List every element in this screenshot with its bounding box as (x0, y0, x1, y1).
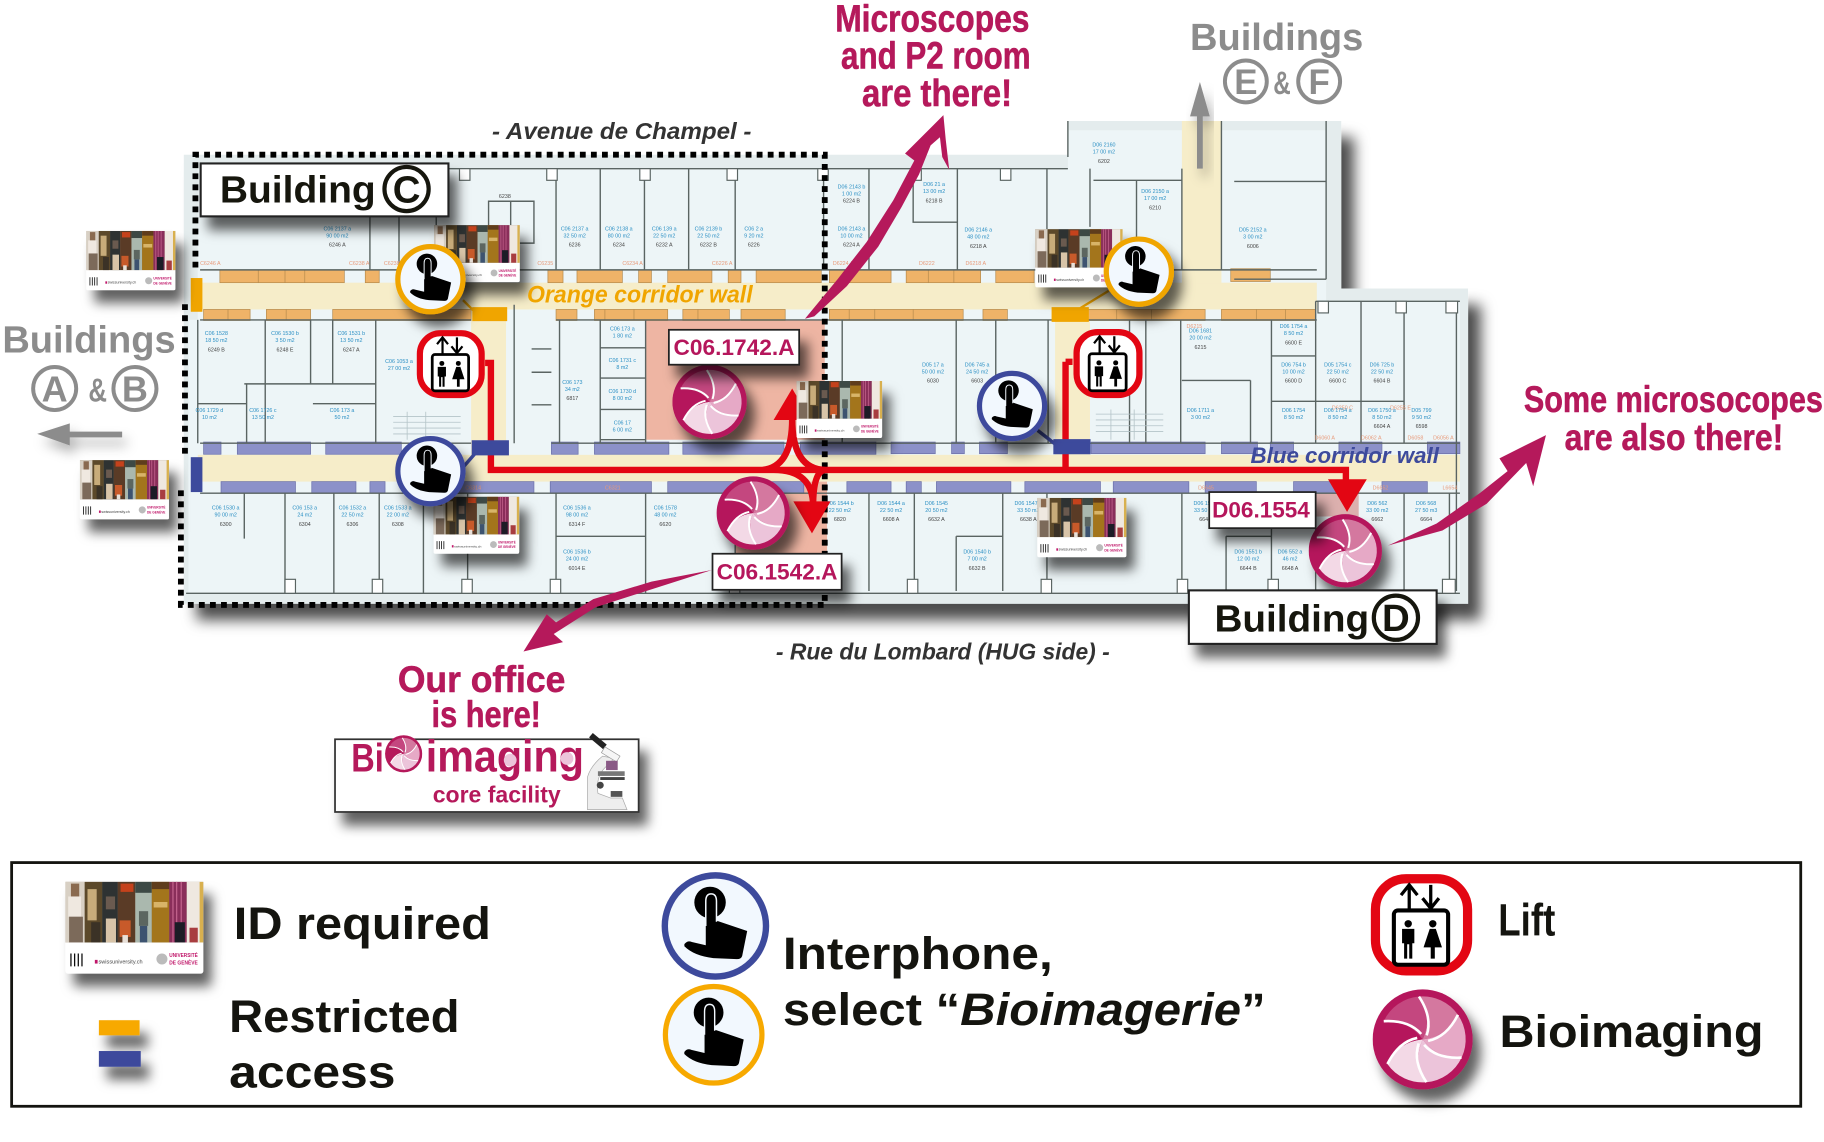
direction: Buildings E and F: & (1273, 65, 1291, 101)
floor plan (184, 121, 1468, 604)
room labels: C06 2138 a (605, 226, 633, 232)
legend: lift icon (1375, 879, 1468, 971)
room labels: C06 173 a (610, 326, 635, 332)
room labels: 6632 B (969, 566, 986, 572)
ID card: entrance left upper (86, 231, 175, 290)
room labels: 8 50 m2 (1372, 415, 1392, 421)
room labels: 48 00 m2 (654, 512, 677, 518)
room labels: 6608 A (883, 517, 900, 523)
door codes: C6314 (465, 486, 481, 492)
room labels: D05 2152 a (1239, 227, 1267, 233)
ID card: building D south (1037, 498, 1126, 557)
room labels: 48 00 m2 (967, 234, 989, 240)
room labels: 17 00 m2 (1144, 196, 1166, 202)
room labels: 6202 (1098, 159, 1110, 165)
room labels: D06 1544 b (826, 501, 854, 507)
logo: Bioimaging core facility: imaging (426, 732, 584, 781)
bioimaging logo: D06.1554 (1305, 513, 1385, 589)
room labels: 6664 (1420, 517, 1432, 523)
door codes: C6246 A (200, 261, 221, 267)
room labels: 24 50 m2 (966, 369, 988, 375)
room labels: 6232 A (656, 243, 673, 249)
room labels: 13 50 m2 (252, 415, 274, 421)
interphone: building C orange (398, 247, 463, 312)
room labels: 6014 E (569, 566, 586, 572)
room label: C06.1742.A (669, 330, 799, 365)
room labels: C06 173 (562, 380, 582, 386)
room labels: D05 799 (1411, 408, 1432, 414)
legend: bioimaging logo (1368, 987, 1478, 1091)
arrow: left (37, 423, 122, 446)
room labels: 6218 A (970, 244, 987, 250)
room labels: 33 50 m2 (1017, 508, 1039, 514)
room labels: C06 17 (614, 421, 631, 427)
route: red lift path with arrows (485, 362, 1367, 533)
room labels: 24 m2 (297, 512, 312, 518)
room labels: 22 50 m2 (341, 512, 364, 518)
door codes: D6224 A (833, 261, 854, 267)
room labels: C06 1530 a (212, 506, 239, 512)
room labels: D06 1551 (1194, 501, 1217, 507)
room labels: 6006 (1247, 244, 1259, 250)
heading: Building C (201, 163, 448, 216)
direction: Buildings A and B: Buildings (2, 318, 176, 361)
room labels: 80 00 m2 (608, 233, 630, 239)
room labels: 6308 (392, 522, 404, 528)
room labels: 6238 (499, 194, 511, 200)
corridor label: orange: Orange corridor wall (527, 281, 754, 308)
room labels: D06 552 a (1278, 550, 1302, 556)
room labels: D06 1540 b (963, 550, 991, 556)
room labels: 6 00 m2 (613, 428, 632, 434)
orange left (191, 278, 202, 312)
room labels: 6236 (569, 243, 581, 249)
door codes: D6062 A (1361, 436, 1382, 442)
room labels: 6249 B (208, 347, 225, 353)
legend: restricted swatches (99, 1020, 141, 1067)
room labels: 27 50 m3 (1415, 508, 1437, 514)
room labels: 24 00 m2 (566, 557, 588, 563)
door codes: C6238 A (349, 261, 370, 267)
room labels: 6620 (659, 522, 671, 528)
room labels: 8 50 m2 (1284, 331, 1303, 337)
room labels: C06 2139 b (695, 226, 722, 232)
room labels: 10 00 m2 (840, 233, 863, 239)
arrow up to C06.1742.A (774, 389, 811, 420)
legend: restricted access text (229, 991, 459, 1098)
callout: Microscopes and P2 room: and P2 room (841, 35, 1031, 78)
room labels: D06 1754 (1282, 408, 1305, 414)
bioimaging logo: C06.1542.A (713, 475, 793, 551)
room labels: 9 20 m2 (744, 233, 763, 239)
room labels: 6817 (566, 396, 578, 402)
room label: D06.1554 (1209, 492, 1316, 528)
room labels: D06 2146 a (964, 227, 992, 233)
room labels: 8 00 m2 (613, 396, 632, 402)
room labels: D05 1754 c (1324, 362, 1351, 368)
room labels: C06 1730 d (609, 389, 636, 395)
bioimaging logo: C06.1742.A (669, 363, 750, 441)
room labels: 18 50 m2 (205, 338, 228, 344)
door codes: D6652 (1373, 486, 1388, 492)
room floor (188, 130, 1460, 593)
heading: Building D: D (1382, 597, 1410, 640)
room labels: 8 m2 (616, 365, 628, 371)
room labels (196, 143, 1437, 572)
room labels: 12 00 m2 (1237, 557, 1259, 563)
room labels: D06 562 (1367, 501, 1387, 507)
logo aperture (383, 734, 424, 773)
callout: Our office: is here! (432, 693, 541, 735)
ID card: building D north (1035, 229, 1123, 287)
room labels: D06 1547 a (1015, 501, 1042, 507)
logo: Bioimaging core facility: Bi (351, 736, 384, 780)
legend: ID required card (65, 882, 203, 974)
room labels: 90 00 m2 (215, 512, 237, 518)
interphone: building D orange (1106, 239, 1171, 304)
room labels: D06 1711 a (1187, 408, 1214, 414)
room labels: D06 568 (1416, 501, 1436, 507)
room labels: 6030 (927, 379, 939, 385)
room labels: C06 1531 b (337, 331, 365, 337)
direction: Buildings E and F (1190, 16, 1363, 169)
room labels: D06 754 b (1281, 362, 1306, 368)
room labels: 98 00 m2 (566, 512, 588, 518)
room labels: C06 1530 b (271, 331, 299, 337)
door codes: C6226 A (712, 261, 733, 267)
room labels: 6300 (220, 522, 232, 528)
room labels: D06 2160 (1092, 143, 1116, 149)
room labels: 6314 F (569, 522, 586, 528)
room labels: 6218 B (926, 198, 943, 204)
heading: Building C: Building (220, 168, 376, 211)
room labels: C06 1536 b (563, 550, 591, 556)
room labels: C06 139 a (652, 226, 677, 232)
callout: Some microscopes: are also there! (1565, 416, 1783, 458)
door codes: D6056 A (1433, 436, 1454, 442)
blue C door (461, 442, 507, 470)
room labels: 33 00 m2 (1366, 508, 1388, 514)
room labels: 20 50 m2 (925, 508, 948, 514)
room labels: 22 50 m2 (697, 233, 720, 239)
room labels: 90 00 m2 (326, 233, 349, 239)
pink rooms (646, 320, 1359, 554)
room labels: 22 50 m2 (880, 508, 902, 514)
room labels: D06 745 a (965, 362, 989, 368)
room labels: 6604 A (1374, 424, 1391, 430)
plan outline (184, 121, 1468, 604)
interphone: building C blue (398, 439, 463, 504)
legend: restricted access text: Restricted (229, 991, 459, 1042)
icon: microscope (587, 735, 627, 810)
room label: D06.1554: D06.1554 (1212, 498, 1311, 523)
room labels: 6820 (834, 517, 846, 523)
door codes: C6234 A (622, 261, 643, 267)
room labels: 32 50 m2 (564, 233, 586, 239)
legend panel (12, 863, 1801, 1106)
room labels: 6600 D (1285, 379, 1302, 385)
room labels: 50 00 m2 (922, 369, 944, 375)
room labels: 27 00 m2 (388, 366, 410, 372)
callout: Our office: Our office (398, 658, 565, 700)
room labels: D05 17 a (922, 362, 944, 368)
room labels: C06 1053 a (385, 359, 413, 365)
callout: Microscopes and P2 room: are there! (862, 72, 1012, 115)
room labels: 22 50 m2 (1371, 369, 1393, 375)
direction: Buildings A and B: & (88, 371, 107, 409)
orange C door (463, 300, 506, 320)
door codes: D6215 (1187, 324, 1202, 330)
room labels: 6644 (1199, 517, 1211, 523)
room labels: 34 m2 (565, 387, 580, 393)
room labels: 6600 E (1285, 340, 1302, 346)
stairs (393, 409, 1163, 440)
room labels: 50 m2 (335, 415, 349, 421)
direction: Buildings A and B (2, 318, 176, 446)
logo: Bioimaging core facility (335, 732, 639, 812)
room labels: 22 50 m2 (653, 233, 675, 239)
ID card: central (797, 381, 882, 438)
corridor label: blue: Blue corridor wall (1251, 443, 1440, 468)
callout: Some microscopes (1388, 378, 1823, 546)
room labels: 6215 (1195, 345, 1206, 351)
room labels: C06 1528 (205, 331, 228, 337)
door codes (200, 261, 1457, 492)
room labels: 6632 A (928, 517, 945, 523)
restricted access markers (191, 278, 1109, 492)
ID card: building C south (434, 497, 519, 554)
room labels: 6600 C (1329, 379, 1347, 385)
direction: Buildings A and B: B (122, 368, 148, 409)
room labels: 6638 A (1020, 517, 1037, 523)
room labels: C06 1578 (654, 506, 677, 512)
callout: Microscopes and P2 room (805, 0, 1031, 319)
legend: interphone orange (665, 986, 762, 1083)
room labels: 10 00 m2 (1282, 369, 1305, 375)
arrow: up (1190, 82, 1210, 169)
legend: lift text: Lift (1498, 894, 1555, 945)
room labels: C06 1729 d (196, 408, 223, 414)
room labels: D06 1754 a (1324, 408, 1352, 414)
room labels: 10 m2 (202, 415, 217, 421)
blue D door (1038, 430, 1089, 453)
room labels: 6644 B (1240, 566, 1257, 572)
room labels: D06 2143 b (838, 184, 865, 190)
room labels: 3 00 m2 (1191, 415, 1210, 421)
room labels: 6648 A (1282, 566, 1299, 572)
room labels: 6232 B (700, 243, 717, 249)
room labels: 22 50 m2 (1327, 369, 1349, 375)
corridors (198, 121, 1460, 482)
legend: interphone text (783, 928, 1266, 1035)
building C dotted boundary (181, 155, 825, 605)
legend: restricted access text: access (229, 1047, 396, 1098)
orange corridor wall segments (204, 269, 1316, 320)
room labels: 1 80 m2 (613, 333, 632, 339)
room label: C06.1542.A: C06.1542.A (717, 559, 838, 584)
room labels: D06 1754 a (1280, 324, 1307, 330)
room labels: 1 00 m2 (842, 191, 861, 197)
street label: Avenue de Champel: - Avenue de Champel - (492, 118, 752, 144)
room labels: C06 2137 a (324, 226, 351, 232)
door codes: D6060 A (1314, 436, 1335, 442)
room labels: 6226 (748, 243, 760, 249)
room labels: 6603 (971, 379, 983, 385)
room labels: C06 1726 c (249, 408, 277, 414)
heading: Building C: C (393, 168, 420, 211)
room labels: D06 1545 (925, 501, 948, 507)
room labels: 3 50 m2 (275, 338, 295, 344)
room labels: 3 00 m2 (1243, 234, 1263, 240)
room labels: C06 153 a (292, 506, 317, 512)
room labels: 22 00 m2 (387, 512, 409, 518)
heading: Building D: Building (1214, 598, 1369, 641)
door codes: D6255 E (1390, 405, 1411, 411)
room labels: 17 00 m2 (1093, 150, 1115, 156)
room labels: 7 00 m2 (967, 557, 987, 563)
legend: ID required text: ID required (234, 898, 491, 949)
door codes: L6654 (1442, 486, 1457, 492)
room labels: C06 2 a (744, 226, 763, 232)
room labels: 6604 B (1373, 379, 1391, 385)
direction: Buildings E and F: Buildings (1190, 16, 1363, 59)
callout: Our office (398, 570, 712, 735)
direction: Buildings E and F: E (1234, 63, 1257, 102)
door codes: D6222 (919, 261, 935, 267)
orange D door (1053, 291, 1109, 321)
room labels: C06 1536 a (563, 506, 591, 512)
room labels: 8 50 m2 (1328, 415, 1347, 421)
room labels: 6224 B (843, 198, 860, 204)
room labels: D06 2143 a (838, 226, 865, 232)
arrow down to D06.1554 (1328, 479, 1367, 512)
room labels: 22 50 m2 (829, 508, 851, 514)
room labels: 6304 (299, 522, 311, 528)
room labels: D06 21 a (923, 182, 945, 188)
legend: bioimaging text: Bioimaging (1499, 1006, 1764, 1057)
room labels: 6246 A (329, 243, 346, 249)
room labels: 8 50 m2 (1284, 415, 1303, 421)
lift: building D (1077, 332, 1139, 395)
room labels: 9 50 m2 (1412, 415, 1431, 421)
arrow down to C06.1542.A (793, 501, 831, 533)
room labels: 6247 A (343, 347, 360, 353)
door codes: D6645 (1198, 486, 1214, 492)
room labels: 6224 A (843, 243, 860, 249)
duct closets (285, 169, 1458, 593)
room label: C06.1742.A: C06.1742.A (674, 335, 795, 360)
room walls (186, 121, 1460, 593)
legend: interphone text: Interphone, (783, 928, 1053, 979)
room labels: D06 1750 a (1368, 408, 1396, 414)
interphone: building D blue (979, 373, 1045, 439)
room labels: C06 1731 c (609, 358, 636, 364)
room labels: D06 2150 a (1141, 189, 1169, 195)
room labels: C06 1533 a (384, 506, 412, 512)
room labels: D06 1544 a (877, 501, 905, 507)
direction: Buildings A and B: A (42, 368, 68, 409)
door codes: C6235 (537, 261, 553, 267)
door codes: D6218 A (966, 261, 986, 267)
logo: Bioimaging core facility: core facility (433, 782, 561, 808)
room labels: 6306 (347, 522, 358, 528)
door codes: C6321 (605, 486, 621, 492)
room labels: 6598 (1416, 424, 1427, 430)
room labels: 6248 E (277, 347, 294, 353)
room labels: 46 m2 (1283, 557, 1298, 563)
legend: interphone text: select “ Bioimagerie ” (783, 984, 1266, 1035)
heading: Building D (1189, 590, 1437, 644)
blue left (191, 457, 202, 492)
room labels: C06 1532 a (339, 506, 366, 512)
legend: interphone blue (665, 875, 766, 977)
room labels: D06 1681 (1189, 329, 1212, 335)
direction: Buildings E and F: F (1308, 63, 1330, 102)
ID card: entrance left lower (80, 460, 169, 519)
room labels: 6234 (613, 243, 625, 249)
arrow: to microscopes (805, 115, 949, 319)
lift: building C (420, 333, 482, 395)
arrow: to office (523, 570, 712, 651)
room labels: 13 00 m2 (923, 189, 945, 195)
street label: Rue du Lombard: - Rue du Lombard (HUG side) - (776, 639, 1110, 665)
door codes: D6250 C (1332, 405, 1353, 411)
room labels: 20 00 m2 (1189, 336, 1212, 342)
room labels: 33 50 m2 (1194, 508, 1216, 514)
room labels: 6210 (1149, 205, 1161, 211)
room labels: D06 1551 b (1234, 550, 1262, 556)
blue corridor wall segments (204, 442, 1460, 493)
door codes: C6238 (384, 261, 400, 267)
arrow: to microscopes D (1388, 435, 1546, 546)
room labels: C06 2137 a (561, 226, 588, 232)
door codes: D6058 (1408, 436, 1423, 442)
room labels: D06 725 b (1370, 362, 1394, 368)
room labels: C06 173 a (330, 408, 354, 414)
room labels: 13 50 m2 (340, 338, 362, 344)
room label: C06.1542.A (712, 554, 842, 590)
room labels: 6662 (1371, 517, 1383, 523)
ID card: building C north (434, 225, 520, 282)
